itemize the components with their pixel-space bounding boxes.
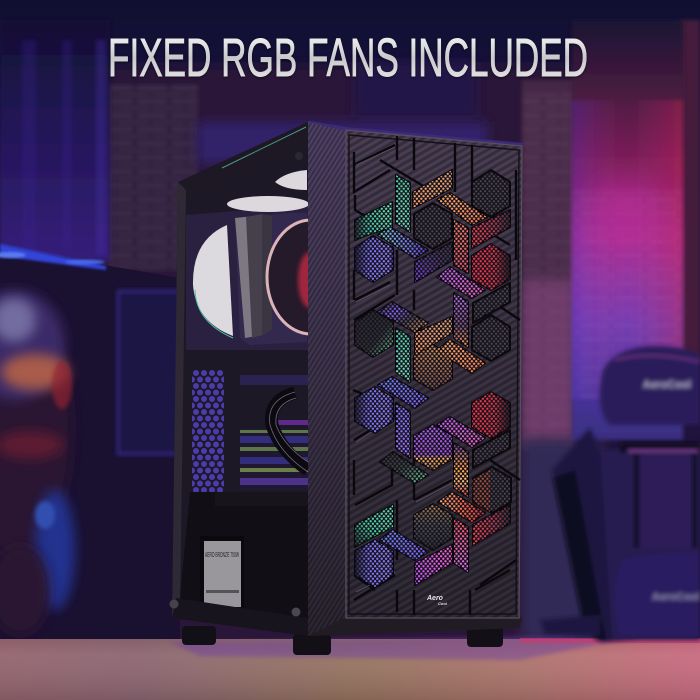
- gaming chair: AeroCool: [652, 592, 700, 603]
- cooler fan ring: [267, 220, 355, 334]
- logo: AeroCool: Cool: [438, 601, 448, 606]
- gaming chair: AeroCool: [643, 379, 691, 391]
- wallpaper art: [0, 290, 75, 635]
- PSU label: AERO BRONZE 750W: [205, 550, 239, 559]
- panel relief lines: [353, 136, 520, 615]
- RGB fan lighting through mesh: [355, 170, 510, 587]
- fan area backing: [186, 205, 308, 350]
- pink lit pillar: [572, 20, 683, 440]
- top fan: [227, 196, 309, 212]
- curtain on left: [0, 20, 110, 260]
- headrest: [600, 346, 700, 425]
- logo: AeroCool: [426, 595, 448, 606]
- chair wing: [552, 428, 640, 642]
- PSU label: [200, 536, 244, 610]
- front panel: [346, 130, 522, 618]
- cpu cooler: [235, 213, 307, 345]
- case bottom strip: [308, 617, 522, 636]
- screws: [174, 192, 182, 200]
- motherboard slots: [240, 375, 308, 490]
- case top edge: [308, 121, 524, 147]
- logo: AeroCool: Aero: [426, 595, 444, 602]
- glass frame: [172, 182, 186, 618]
- rear fan white crescent: [193, 225, 233, 336]
- gaming chair: [540, 346, 700, 642]
- mesh panels: [355, 170, 511, 587]
- cable bundle: [271, 393, 308, 470]
- monitor back plate: [118, 291, 180, 454]
- PC case feet: [182, 626, 503, 655]
- rear vent grid: [192, 370, 224, 510]
- case side edge carbon strip: [308, 121, 346, 636]
- monitor on left: [0, 244, 180, 642]
- back slot: [620, 443, 700, 453]
- table top: [0, 636, 700, 700]
- side glass panel: [170, 121, 355, 636]
- PSU shroud: [178, 492, 308, 636]
- seat cushion: [614, 552, 700, 636]
